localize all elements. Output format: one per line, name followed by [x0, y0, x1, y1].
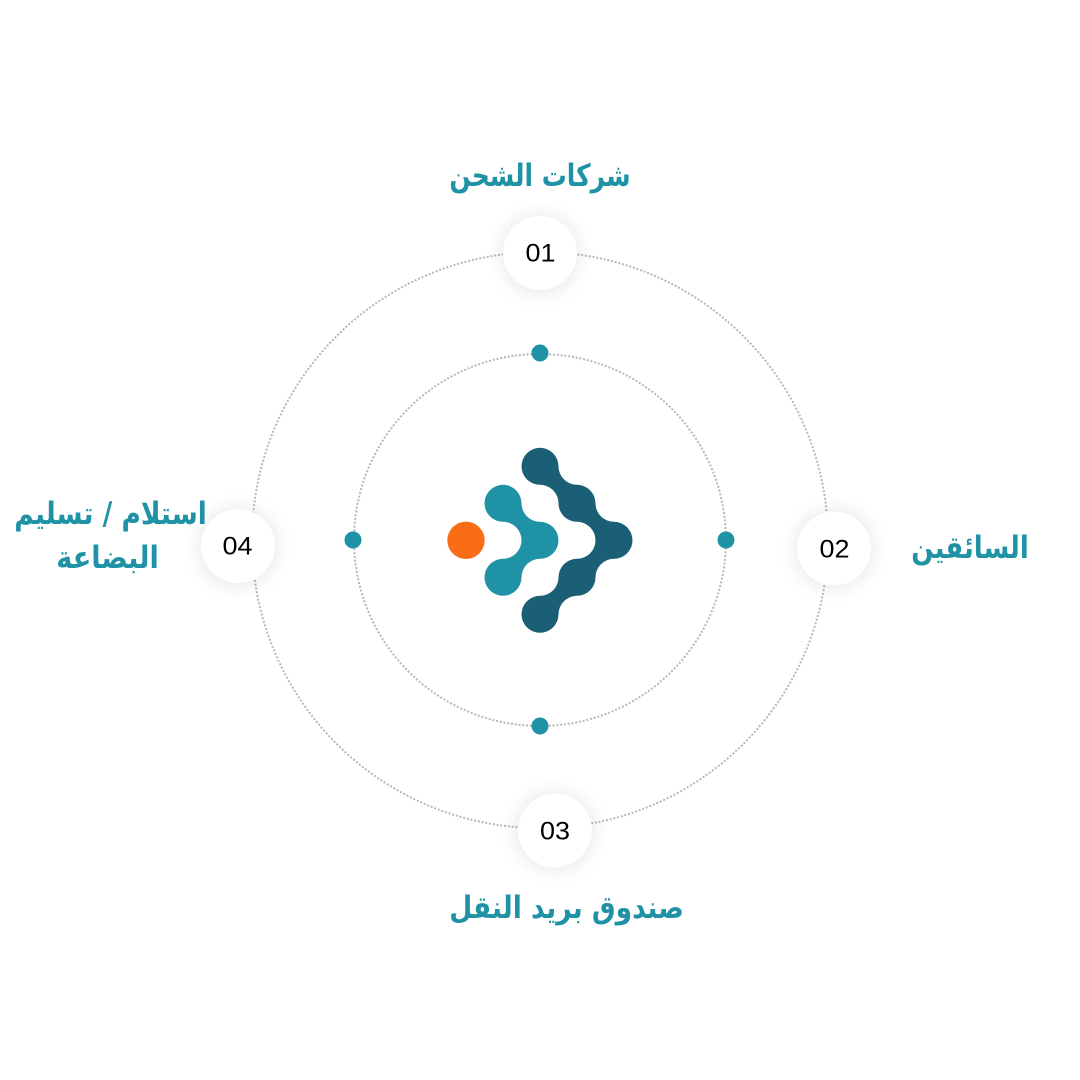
- node 02: [796, 511, 872, 587]
- label: pickup and delivery: البضاعة: [56, 539, 159, 575]
- node 04: 04: [222, 531, 253, 560]
- center logo: [447, 448, 632, 633]
- label: parcel box: صندوق بريد النقل: [449, 889, 684, 926]
- label: pickup and delivery: استلام / تسليم: [14, 495, 207, 532]
- node 01: 01: [525, 238, 556, 267]
- label: shipping companies: شركات الشحن: [449, 157, 631, 194]
- node 04: [200, 509, 276, 585]
- outer dotted ring: [252, 252, 828, 828]
- ring dots: [344, 344, 734, 734]
- label: pickup and delivery: [14, 495, 207, 575]
- inner dotted ring: [354, 354, 726, 726]
- node 02: 02: [819, 534, 850, 563]
- logo: dark chevron: [522, 448, 632, 633]
- node 01: [502, 216, 578, 292]
- label: drivers: السائقين: [911, 530, 1029, 566]
- node 03: [517, 793, 593, 869]
- node 03: 03: [540, 816, 570, 845]
- logo: orange dot: [447, 522, 485, 559]
- logo: teal chevron: [484, 485, 558, 596]
